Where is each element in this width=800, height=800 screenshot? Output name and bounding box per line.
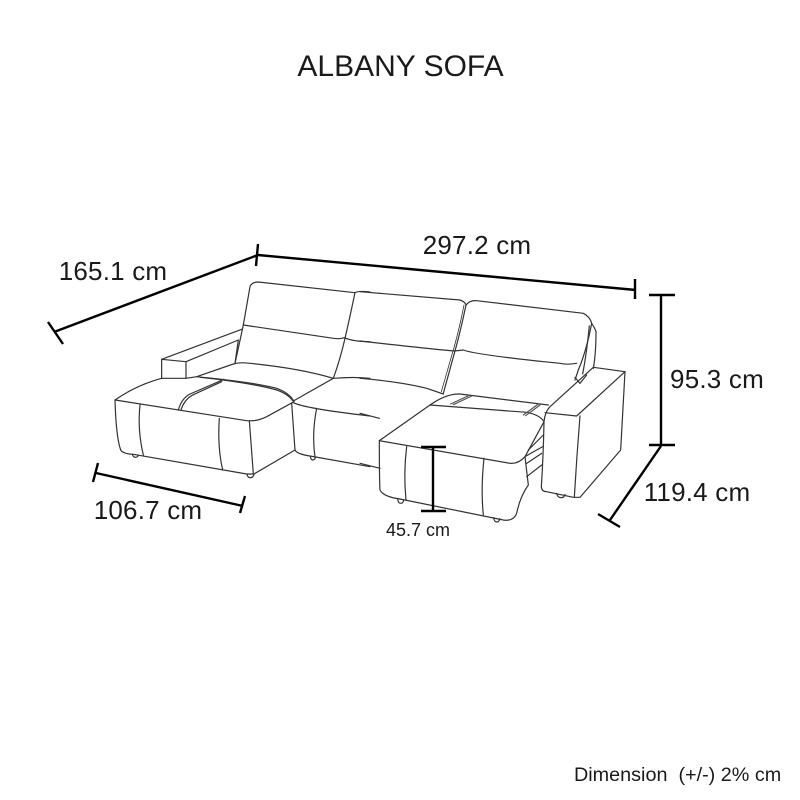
title: ALBANY SOFA — [297, 50, 504, 83]
dimension: arm depth 119.4 cm: 119.4 cm — [644, 477, 750, 507]
dimension: depth 165.1 cm — [48, 244, 258, 344]
sofa line drawing — [115, 282, 625, 522]
dimension: width 297.2 cm — [258, 230, 636, 299]
tolerance note: Dimension (+/-) 2% cm — [574, 764, 781, 786]
sofa: footrest, right back and right arm — [360, 292, 625, 522]
dimension: seat height 45.7 cm: 45.7 cm — [386, 520, 450, 540]
dimension: depth 165.1 cm: 165.1 cm — [59, 256, 167, 286]
dimension: height 95.3 cm: 95.3 cm — [670, 364, 764, 394]
dimension: arm depth 119.4 cm — [598, 446, 750, 527]
dimension: height 95.3 cm — [649, 295, 764, 445]
dimension: chaise width 106.7 cm — [93, 463, 245, 525]
dimension: seat height 45.7 cm — [386, 447, 450, 540]
sofa: left chaise and left and centre backs — [115, 282, 370, 478]
dimension: width 297.2 cm: 297.2 cm — [423, 230, 531, 260]
dimension: chaise width 106.7 cm: 106.7 cm — [94, 495, 202, 525]
